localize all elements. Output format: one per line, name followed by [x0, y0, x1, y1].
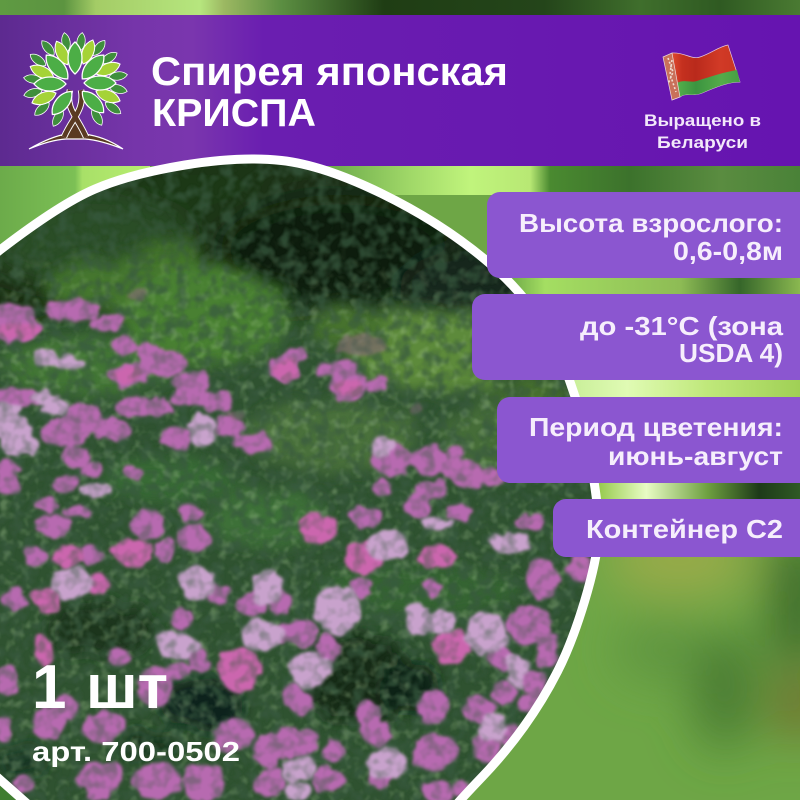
- title: Спирея японская: [151, 50, 508, 94]
- panel: height: [487, 192, 800, 278]
- panel: hardiness: [472, 294, 800, 380]
- icon: Belarus flag: [663, 45, 740, 100]
- white ring around the photo: [0, 159, 599, 800]
- panel: flowering period: Период цветения:: [529, 412, 783, 442]
- icon: tree logo: [23, 32, 128, 149]
- title: [151, 50, 508, 135]
- panel: container: [553, 499, 800, 557]
- quantity: шт: [86, 653, 168, 722]
- grown in Belarus label: [644, 111, 761, 152]
- header band: [0, 15, 800, 166]
- quantity: 1: [32, 653, 66, 722]
- panel: hardiness: USDA 4): [679, 338, 783, 368]
- title: КРИСПА: [152, 92, 316, 135]
- panel: flowering period: июнь-август: [608, 441, 783, 471]
- panel: hardiness: до -31°C (зона: [580, 311, 784, 341]
- tree trunk and ground: [29, 90, 123, 149]
- article number: арт. 700-0502: [32, 736, 240, 767]
- panel: container: Контейнер С2: [586, 514, 783, 544]
- panel: height: Высота взрослого:: [519, 208, 783, 238]
- grown in Belarus label: Беларуси: [657, 133, 748, 152]
- grown in Belarus label: Выращено в: [644, 111, 761, 130]
- panel: height: 0,6-0,8м: [673, 236, 783, 266]
- panel: flowering period: [497, 397, 800, 483]
- circular photo of flowering spirea shrub: [0, 164, 592, 800]
- tree leaves: [23, 32, 128, 128]
